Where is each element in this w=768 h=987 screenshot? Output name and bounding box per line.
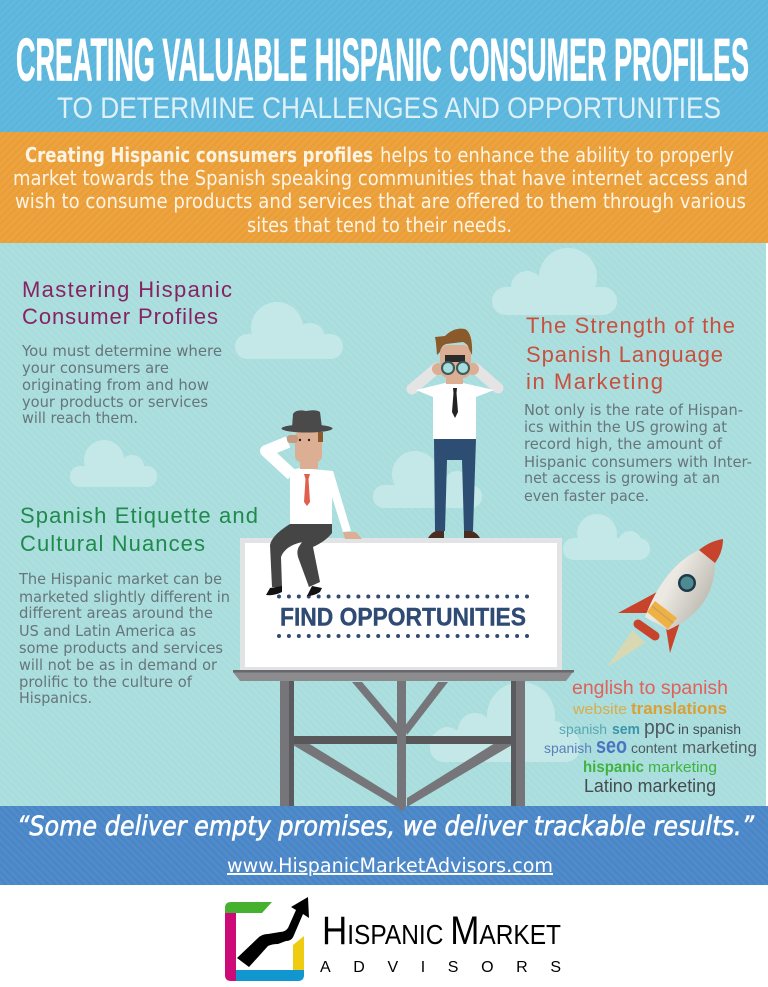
heading: Spanish Etiquette and	[20, 503, 258, 528]
heading: in Marketing	[526, 369, 663, 394]
heading	[20, 503, 258, 556]
body text: Not only is the rate of Hispan-	[524, 401, 743, 419]
word cloud: hispanic	[583, 759, 644, 776]
word cloud: website	[572, 701, 627, 718]
word cloud: english to spanish	[572, 678, 728, 699]
body text: You must determine where	[21, 342, 222, 360]
body text	[21, 342, 222, 427]
intro text: helps to enhance the ability to properly	[380, 143, 734, 167]
word cloud: marketing	[648, 759, 717, 776]
word cloud: Latino marketing	[584, 776, 716, 796]
heading: Spanish Language	[526, 342, 723, 367]
body text: Hispanics.	[19, 689, 92, 707]
billboard structure	[233, 670, 574, 808]
body text: some products and services	[19, 639, 223, 657]
body text: originating from and how	[22, 376, 209, 394]
logo mark	[225, 897, 309, 981]
clouds	[70, 248, 650, 762]
body text: record high, the amount of	[524, 435, 723, 453]
website link: www.HispanicMarketAdvisors.com	[227, 854, 553, 877]
intro band	[0, 132, 768, 243]
heading: Mastering Hispanic	[22, 277, 232, 302]
body text: ics within the US growing at	[524, 418, 727, 436]
word cloud: in spanish	[678, 721, 741, 737]
man with binoculars	[412, 329, 498, 538]
word cloud: spanish	[544, 740, 592, 756]
footer logo	[0, 885, 768, 987]
billboard panel	[240, 538, 562, 670]
body text	[524, 401, 752, 505]
billboard headline: FIND OPPORTUNITIES	[280, 604, 526, 632]
quote band	[0, 806, 768, 885]
word cloud	[544, 678, 757, 796]
word cloud: seo	[596, 733, 627, 758]
man with hat	[266, 410, 362, 596]
heading	[22, 277, 232, 329]
heading	[526, 313, 735, 394]
header panel	[0, 0, 768, 132]
body text: even faster pace.	[524, 487, 649, 505]
icon: rocket	[607, 539, 723, 667]
word cloud: translations	[631, 699, 727, 718]
body text: marketed slightly different in	[19, 588, 230, 606]
body text: net access is growing at an	[524, 469, 720, 487]
body text: Hispanic consumers with Inter-	[524, 453, 752, 471]
word cloud: spanish	[559, 721, 607, 737]
intro text	[13, 143, 748, 237]
body text: The Hispanic market can be	[18, 570, 222, 588]
word cloud: ppc	[644, 717, 675, 739]
word cloud: marketing	[682, 738, 757, 757]
section: The Strength of the Spanish Language in Marketing	[524, 313, 752, 505]
body text: US and Latin America as	[19, 622, 196, 640]
body text: prolific to the culture of	[19, 673, 193, 691]
section: Mastering Hispanic Consumer Profiles	[21, 277, 232, 427]
heading: Cultural Nuances	[20, 531, 205, 556]
heading: Consumer Profiles	[22, 304, 218, 329]
word cloud: content	[631, 740, 677, 756]
intro text: sites that tend to their needs.	[247, 213, 512, 237]
word cloud: sem	[612, 721, 640, 738]
intro text: Creating Hispanic consumers profiles	[25, 143, 373, 167]
section: Spanish Etiquette and Cultural Nuances	[18, 503, 258, 707]
logo tagline: ADVISORS	[320, 959, 561, 976]
teal background	[0, 243, 766, 806]
logo wordmark: HISPANIC MARKET	[322, 909, 561, 953]
body text: your consumers are	[22, 359, 169, 377]
body text: your products or services	[22, 393, 208, 411]
body text	[18, 570, 230, 707]
body text: will reach them.	[22, 409, 138, 427]
heading: The Strength of the	[526, 313, 735, 338]
body text: will not be as in demand or	[19, 656, 218, 674]
body text: different areas around the	[19, 604, 213, 622]
